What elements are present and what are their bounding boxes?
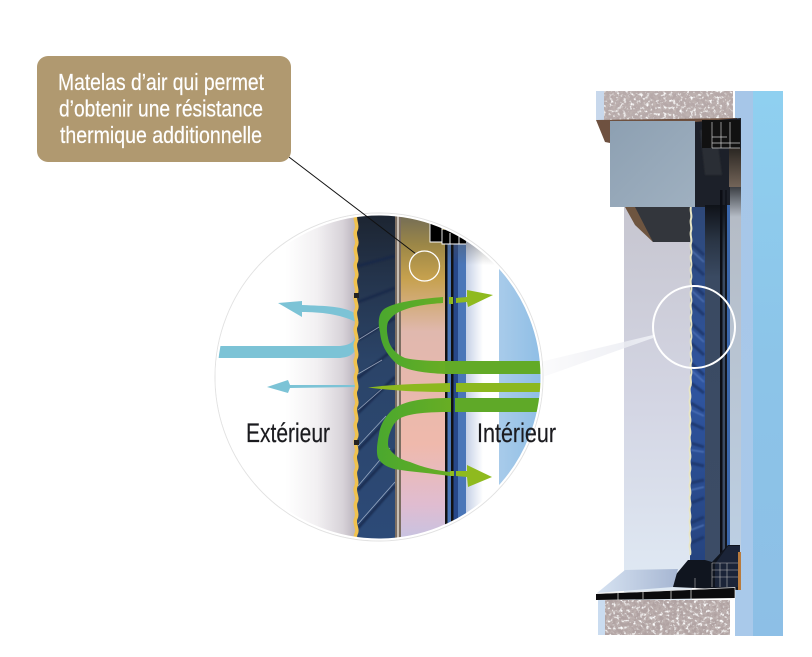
- right illustration: window section with roller shutter: [596, 91, 783, 636]
- window sill profile: [673, 545, 741, 590]
- leader line from callout to air gap: [285, 154, 440, 281]
- callout text: thermique additionnelle: [60, 122, 262, 148]
- callout text: d’obtenir une résistance: [59, 96, 263, 122]
- brown-grey frame strip: [729, 148, 741, 187]
- exterior wall render: [624, 200, 692, 620]
- black profile with white edges: [702, 120, 740, 148]
- shutter box: [610, 121, 695, 207]
- green curved flow lower: [377, 398, 451, 476]
- label: interieur: Intérieur: [477, 418, 556, 448]
- frame profile dark top section: [695, 118, 741, 240]
- exterior wall in circle: [303, 218, 355, 536]
- shutter front edge yellow: [355, 214, 357, 550]
- callout text: [58, 69, 265, 148]
- callout text: Matelas d’air qui permet: [58, 69, 265, 95]
- green bottom arrow: [450, 465, 492, 487]
- callout box: [37, 56, 291, 162]
- black frame profile top: [430, 222, 466, 244]
- interior sky-blue glazing and reveal: [735, 91, 783, 636]
- underside of lintel: [635, 207, 695, 242]
- top stone lintel: [596, 91, 733, 120]
- green horizontal bands: [368, 361, 545, 412]
- air gap with warm gradient: [395, 212, 446, 544]
- blue outgoing arrows: [218, 301, 356, 393]
- shutter slats in circle: [357, 212, 396, 544]
- pale reveal beside window: [730, 187, 741, 562]
- green top arrow: [449, 290, 493, 307]
- window glazing bands: [445, 230, 540, 524]
- magnified circle detail: [214, 212, 545, 550]
- rolling shutter slats: [690, 207, 705, 562]
- window frame column: [705, 205, 730, 566]
- bottom stone: [598, 600, 730, 635]
- zoom connector beam: [540, 335, 653, 378]
- green curved flow upper: [379, 297, 445, 374]
- label: exterieur: Extérieur: [246, 418, 330, 448]
- air gap marker ring: [410, 251, 440, 281]
- brown lintel edge: [596, 118, 737, 143]
- sloped sill top: [597, 569, 678, 593]
- magnifier ring on the illustration: [653, 286, 735, 368]
- black outer sill: [596, 588, 735, 600]
- shutter front edge: [690, 207, 691, 555]
